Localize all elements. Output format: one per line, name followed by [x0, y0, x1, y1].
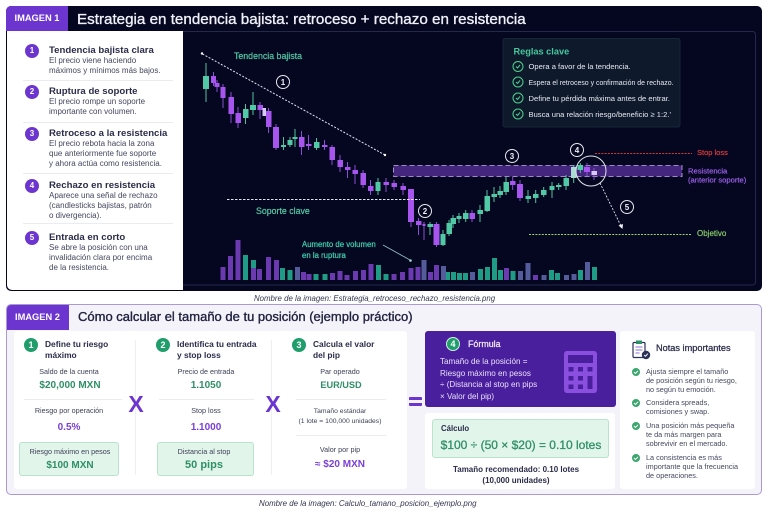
marker 2 [418, 204, 432, 218]
nota text [646, 453, 738, 480]
nota text: comisiones y swap. [646, 407, 709, 416]
number 3: 3 [296, 340, 302, 350]
valor: Valor por pip [320, 445, 360, 454]
step 1 text: máximos y mínimos más bajos. [49, 66, 161, 75]
support line [227, 198, 420, 200]
step 4 text [49, 191, 158, 220]
stop value: 1.1000 [191, 422, 221, 433]
panel: fórmula [425, 331, 616, 407]
step 3 text: que anteriormente fue soporte [49, 149, 156, 158]
number 1: 1 [28, 340, 34, 350]
par value: EUR/USD [320, 380, 362, 390]
objective line [529, 234, 692, 236]
cálculo formula: $100 ÷ (50 × $20) = 0.10 lotes [441, 438, 601, 452]
number 3 [25, 127, 39, 141]
tamano [298, 408, 382, 425]
marker 2: 2 [423, 207, 428, 216]
step 3 column [292, 338, 382, 470]
number 5: 5 [30, 233, 34, 242]
number 1 [24, 338, 38, 352]
nota text [646, 421, 734, 448]
saldo value: $20,000 MXN [39, 380, 101, 391]
label: aumento de volumen: en la ruptura [302, 251, 346, 260]
step 3 heading: Retroceso a la resistencia [49, 128, 167, 139]
nota text: Una posición más pequeña [646, 421, 734, 430]
recommended size: (10,000 unidades) [482, 476, 550, 485]
number 4 [25, 179, 39, 193]
number 4: 4 [30, 181, 34, 190]
label: aumento de volumen [302, 240, 376, 260]
fórmula heading: Fórmula [468, 339, 501, 349]
regla 3: Define tu pérdida máxima antes de entrar. [528, 94, 670, 103]
step 5 [25, 231, 152, 272]
chart: velas y volumen [183, 31, 756, 286]
panel: notas importantes [620, 331, 755, 489]
result box [157, 442, 254, 476]
operator x 2: X [265, 391, 281, 417]
candle bodies: bearish [211, 76, 590, 245]
step 1 heading: Tendencia bajista clara [49, 45, 154, 56]
icon: calculator [564, 351, 597, 393]
step 5 text: invalidación clara por encima [49, 253, 152, 262]
number 5 [25, 231, 39, 245]
riesgo value: 0.5% [58, 422, 80, 433]
number 2: 2 [30, 87, 34, 96]
number 4 [446, 337, 460, 351]
heading: Calcula el valor [313, 339, 374, 349]
heading: Identifica tu entrada [177, 339, 257, 349]
card: pasos de cálculo [14, 331, 407, 489]
operator equals [409, 397, 422, 406]
nota text: Considera spreads, [646, 398, 709, 407]
reglas heading: Reglas clave [514, 46, 569, 56]
label: imagen 1: IMAGEN 1 [15, 13, 59, 23]
label: soporte clave: Soporte clave [256, 206, 310, 216]
label: imagen 1 [6, 6, 68, 31]
tamano: (1 lote = 100,000 unidades) [299, 418, 381, 425]
label: objetivo: Objetivo [697, 229, 727, 238]
number 2: 2 [160, 340, 166, 350]
step 5 text: de la resistencia. [49, 263, 109, 272]
step 2 text: El precio rompe un soporte [49, 97, 145, 106]
marker 5 [620, 200, 634, 214]
result label: Riesgo máximo en pesos [30, 447, 110, 456]
step 5 text [49, 243, 152, 272]
step 3 text [49, 139, 162, 168]
marker 5: 5 [625, 203, 630, 212]
resistance zone [394, 166, 682, 176]
step 2 text [49, 97, 145, 116]
step 4 text: o divergencia). [49, 211, 101, 220]
precio value: 1.1050 [191, 380, 221, 391]
step 4 heading: Rechazo en resistencia [49, 180, 155, 191]
nota text: La consistencia es más [646, 453, 722, 462]
nota text: no según tu emoción. [646, 385, 716, 394]
nota 4 [632, 453, 738, 480]
label: tendencia bajista: Tendencia bajista [234, 51, 302, 61]
result value: $100 MXN [46, 460, 94, 471]
step 3 [25, 127, 168, 168]
number 3 [292, 338, 306, 352]
step 2 text: importante con volumen. [49, 107, 137, 116]
heading: y stop loss [177, 350, 221, 360]
nota 2 [632, 398, 709, 416]
candle wicks [206, 63, 594, 247]
nota text: de posición según tu riesgo, [646, 376, 737, 385]
nota text: de operaciones. [646, 471, 698, 480]
marker 4 [570, 144, 584, 156]
nota text: importante que la frecuencia [646, 462, 738, 471]
step 1 [25, 44, 161, 75]
cálculo label: Cálculo [441, 424, 469, 433]
par: Par operado [320, 367, 360, 376]
step 4 text: (candlesticks bajistas, patrón [49, 201, 152, 210]
arrow: entrada en corto [600, 183, 623, 229]
recommended size [453, 465, 579, 485]
step 3 text: y ahora actúa como resistencia. [49, 159, 162, 168]
fórmula text: Tamaño de la posición = [440, 357, 528, 366]
heading [177, 339, 257, 360]
step 1 column [19, 338, 119, 476]
step 2 heading: Ruptura de soporte [49, 86, 137, 97]
marker 1: 1 [281, 78, 286, 87]
number 1 [25, 44, 39, 58]
riesgo: Riesgo por operación [35, 406, 103, 415]
check [632, 422, 640, 430]
panel: pasos [7, 31, 183, 290]
nota text: Ajusta siempre el tamaño [646, 367, 728, 376]
check [632, 454, 640, 462]
marker 4: 4 [575, 146, 580, 155]
step 5 heading: Entrada en corto [49, 232, 125, 243]
nota text: sobrevivir en el mercado. [646, 439, 728, 448]
number 3: 3 [30, 129, 34, 138]
panel: imagen 2 [6, 304, 762, 495]
title: Estrategia en tendencia bajista: retroceso + rechazo en resistencia [77, 11, 526, 28]
volume bars [220, 240, 597, 280]
label: resistencia: (anterior soporte) [688, 176, 747, 184]
panel: reglas clave [503, 38, 680, 127]
regla 2: Espera el retroceso y confirmación de rechazo. [528, 78, 674, 87]
step 1 text [49, 56, 161, 75]
number 4: 4 [450, 339, 456, 349]
candle bodies: bullish [203, 76, 583, 245]
trend line [201, 52, 386, 156]
check [632, 399, 640, 407]
heading: máximo [45, 350, 77, 360]
number 2 [25, 85, 39, 99]
heading [313, 339, 374, 360]
notas heading: Notas importantes [656, 343, 731, 353]
marker 3 [506, 150, 518, 162]
step 1 text: El precio viene haciendo [49, 56, 136, 65]
stop loss line [595, 152, 692, 154]
nota 1 [632, 367, 737, 394]
label: aumento de volumen: Aumento de volumen [302, 240, 376, 249]
step 3 text: El precio rebota hacia la zona [49, 139, 154, 148]
result value: 50 pips [185, 459, 223, 471]
regla 1: Opera a favor de la tendencia. [528, 62, 631, 71]
number 2 [156, 338, 170, 352]
recommended size: Tamaño recomendado: 0.10 lotes [453, 465, 579, 474]
precio: Precio de entrada [178, 367, 234, 376]
tamano: Tamaño estándar [314, 408, 366, 415]
heading [45, 339, 108, 360]
icon: clipboard [632, 340, 650, 360]
marker 1 [276, 76, 290, 88]
title: Cómo calcular el tamaño de tu posición (ejemplo práctico) [78, 309, 413, 324]
result box [19, 442, 119, 476]
nota 3 [632, 421, 734, 448]
caption 2: Nombre de la imagen: Calculo_tamano_posicion_ejemplo.png [259, 499, 477, 508]
panel: cálculo [425, 413, 615, 489]
label: imagen 2: IMAGEN 2 [15, 312, 60, 322]
label: resistencia [688, 166, 747, 184]
step 2 [25, 85, 145, 116]
label: imagen 2 [6, 304, 69, 330]
saldo: Saldo de la cuenta [39, 367, 99, 376]
fórmula text: Riesgo máximo en pesos [440, 369, 531, 378]
number 1: 1 [30, 46, 34, 55]
fórmula text: × Valor del pip) [440, 392, 494, 401]
panel: imagen 1 [6, 6, 762, 291]
arrow: volumen [383, 245, 412, 262]
nota text [646, 367, 737, 394]
label: stop loss: Stop loss [697, 148, 728, 157]
label: resistencia: Resistencia [688, 166, 728, 176]
step 4 text: Aparece una señal de rechazo [49, 191, 158, 200]
calculation box [432, 419, 609, 458]
rejection circle [576, 156, 606, 186]
operator x 1: X [128, 391, 144, 417]
step 4 [25, 179, 158, 220]
fórmula text: ÷ (Distancia al stop en pips [440, 380, 537, 389]
caption 1: Nombre de la imagen: Estrategia_retroceso_rechazo_resistencia.png [254, 294, 495, 303]
step 2 column [156, 338, 257, 476]
stop: Stop loss [191, 406, 221, 415]
regla 4: Busca una relación riesgo/beneficio ≥ 1:2.' [528, 110, 671, 119]
nota text: te da más margen para [646, 430, 721, 439]
valor value: ≈ $20 MXN [315, 459, 365, 470]
heading: del pip [313, 350, 340, 360]
marker 3: 3 [510, 152, 515, 161]
heading: Define tu riesgo [45, 339, 108, 349]
nota text [646, 398, 709, 416]
result label: Distancia al stop [178, 447, 230, 456]
check [632, 368, 640, 376]
fórmula text [440, 357, 537, 401]
step 5 text: Se abre la posición con una [49, 243, 148, 252]
